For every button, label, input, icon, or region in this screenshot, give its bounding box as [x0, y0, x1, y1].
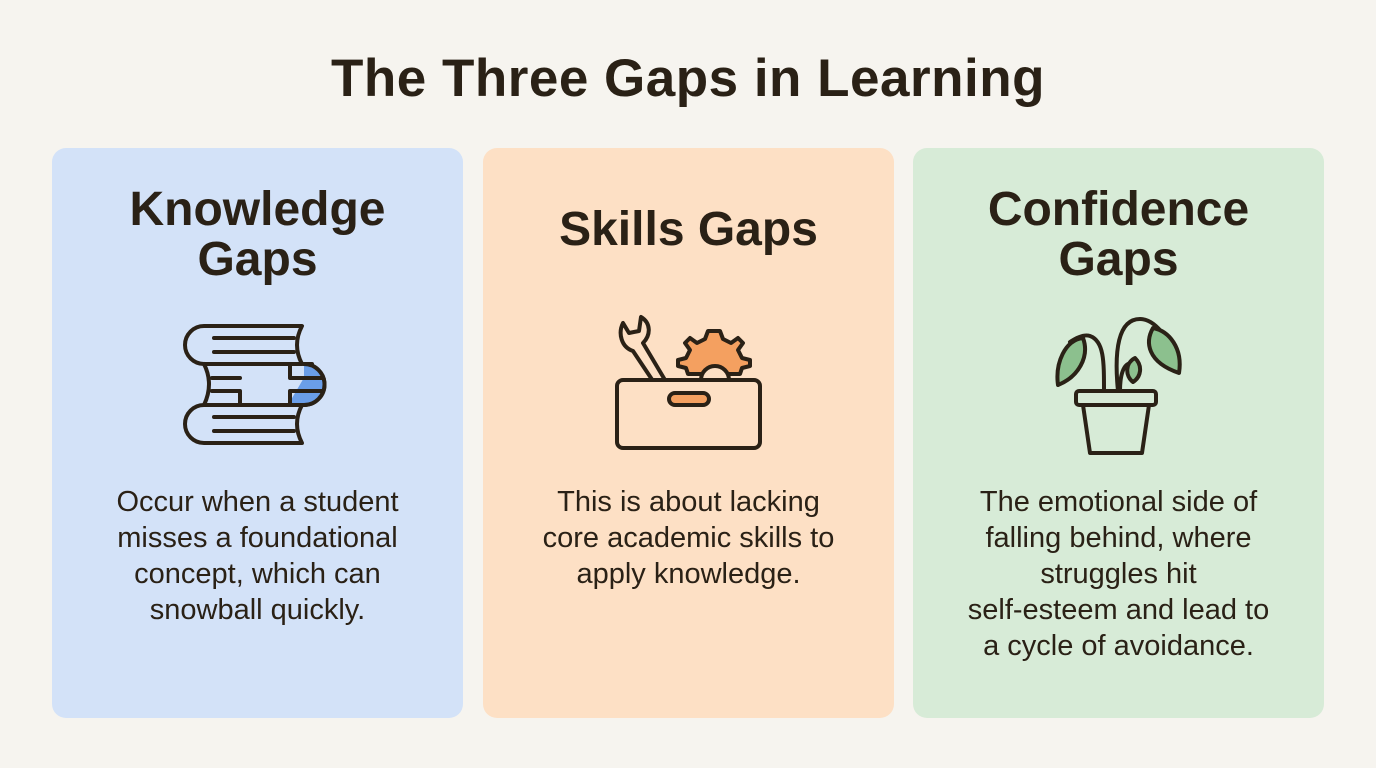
- heading: skills: Skills Gaps: [559, 203, 818, 256]
- text: knowledge: Occur when a student: [116, 486, 399, 518]
- title: The Three Gaps in Learning: [331, 49, 1045, 108]
- text: confidence: self-esteem and lead to: [968, 594, 1269, 626]
- text: skills: core academic skills to: [543, 522, 834, 554]
- text: confidence: falling behind, where: [985, 522, 1252, 554]
- text: skills: apply knowledge.: [576, 558, 801, 590]
- text: confidence: The emotional side of: [980, 486, 1257, 518]
- text: knowledge: concept, which can: [134, 558, 381, 590]
- text: confidence: a cycle of avoidance.: [983, 630, 1254, 662]
- icon: plant: [1055, 317, 1182, 455]
- text: confidence: struggles hit: [1040, 558, 1197, 590]
- text: skills: This is about lacking: [557, 486, 820, 518]
- heading: confidence: [988, 183, 1249, 286]
- panel: skills gaps: [483, 148, 894, 718]
- icon: books: [183, 324, 326, 445]
- heading: confidence: Confidence: [988, 183, 1249, 236]
- panel: knowledge gaps: [52, 148, 463, 718]
- text: knowledge: snowball quickly.: [150, 594, 365, 626]
- text: knowledge: [116, 486, 399, 626]
- text: skills: [543, 486, 834, 590]
- heading: knowledge: Knowledge: [129, 183, 386, 236]
- heading: confidence: Gaps: [1058, 233, 1179, 286]
- icon: toolbox: [615, 314, 762, 450]
- panel: confidence gaps: [913, 148, 1324, 718]
- text: confidence: [968, 486, 1269, 662]
- text: knowledge: misses a foundational: [117, 522, 398, 554]
- heading: knowledge: Gaps: [197, 233, 318, 286]
- heading: knowledge: [129, 183, 386, 286]
